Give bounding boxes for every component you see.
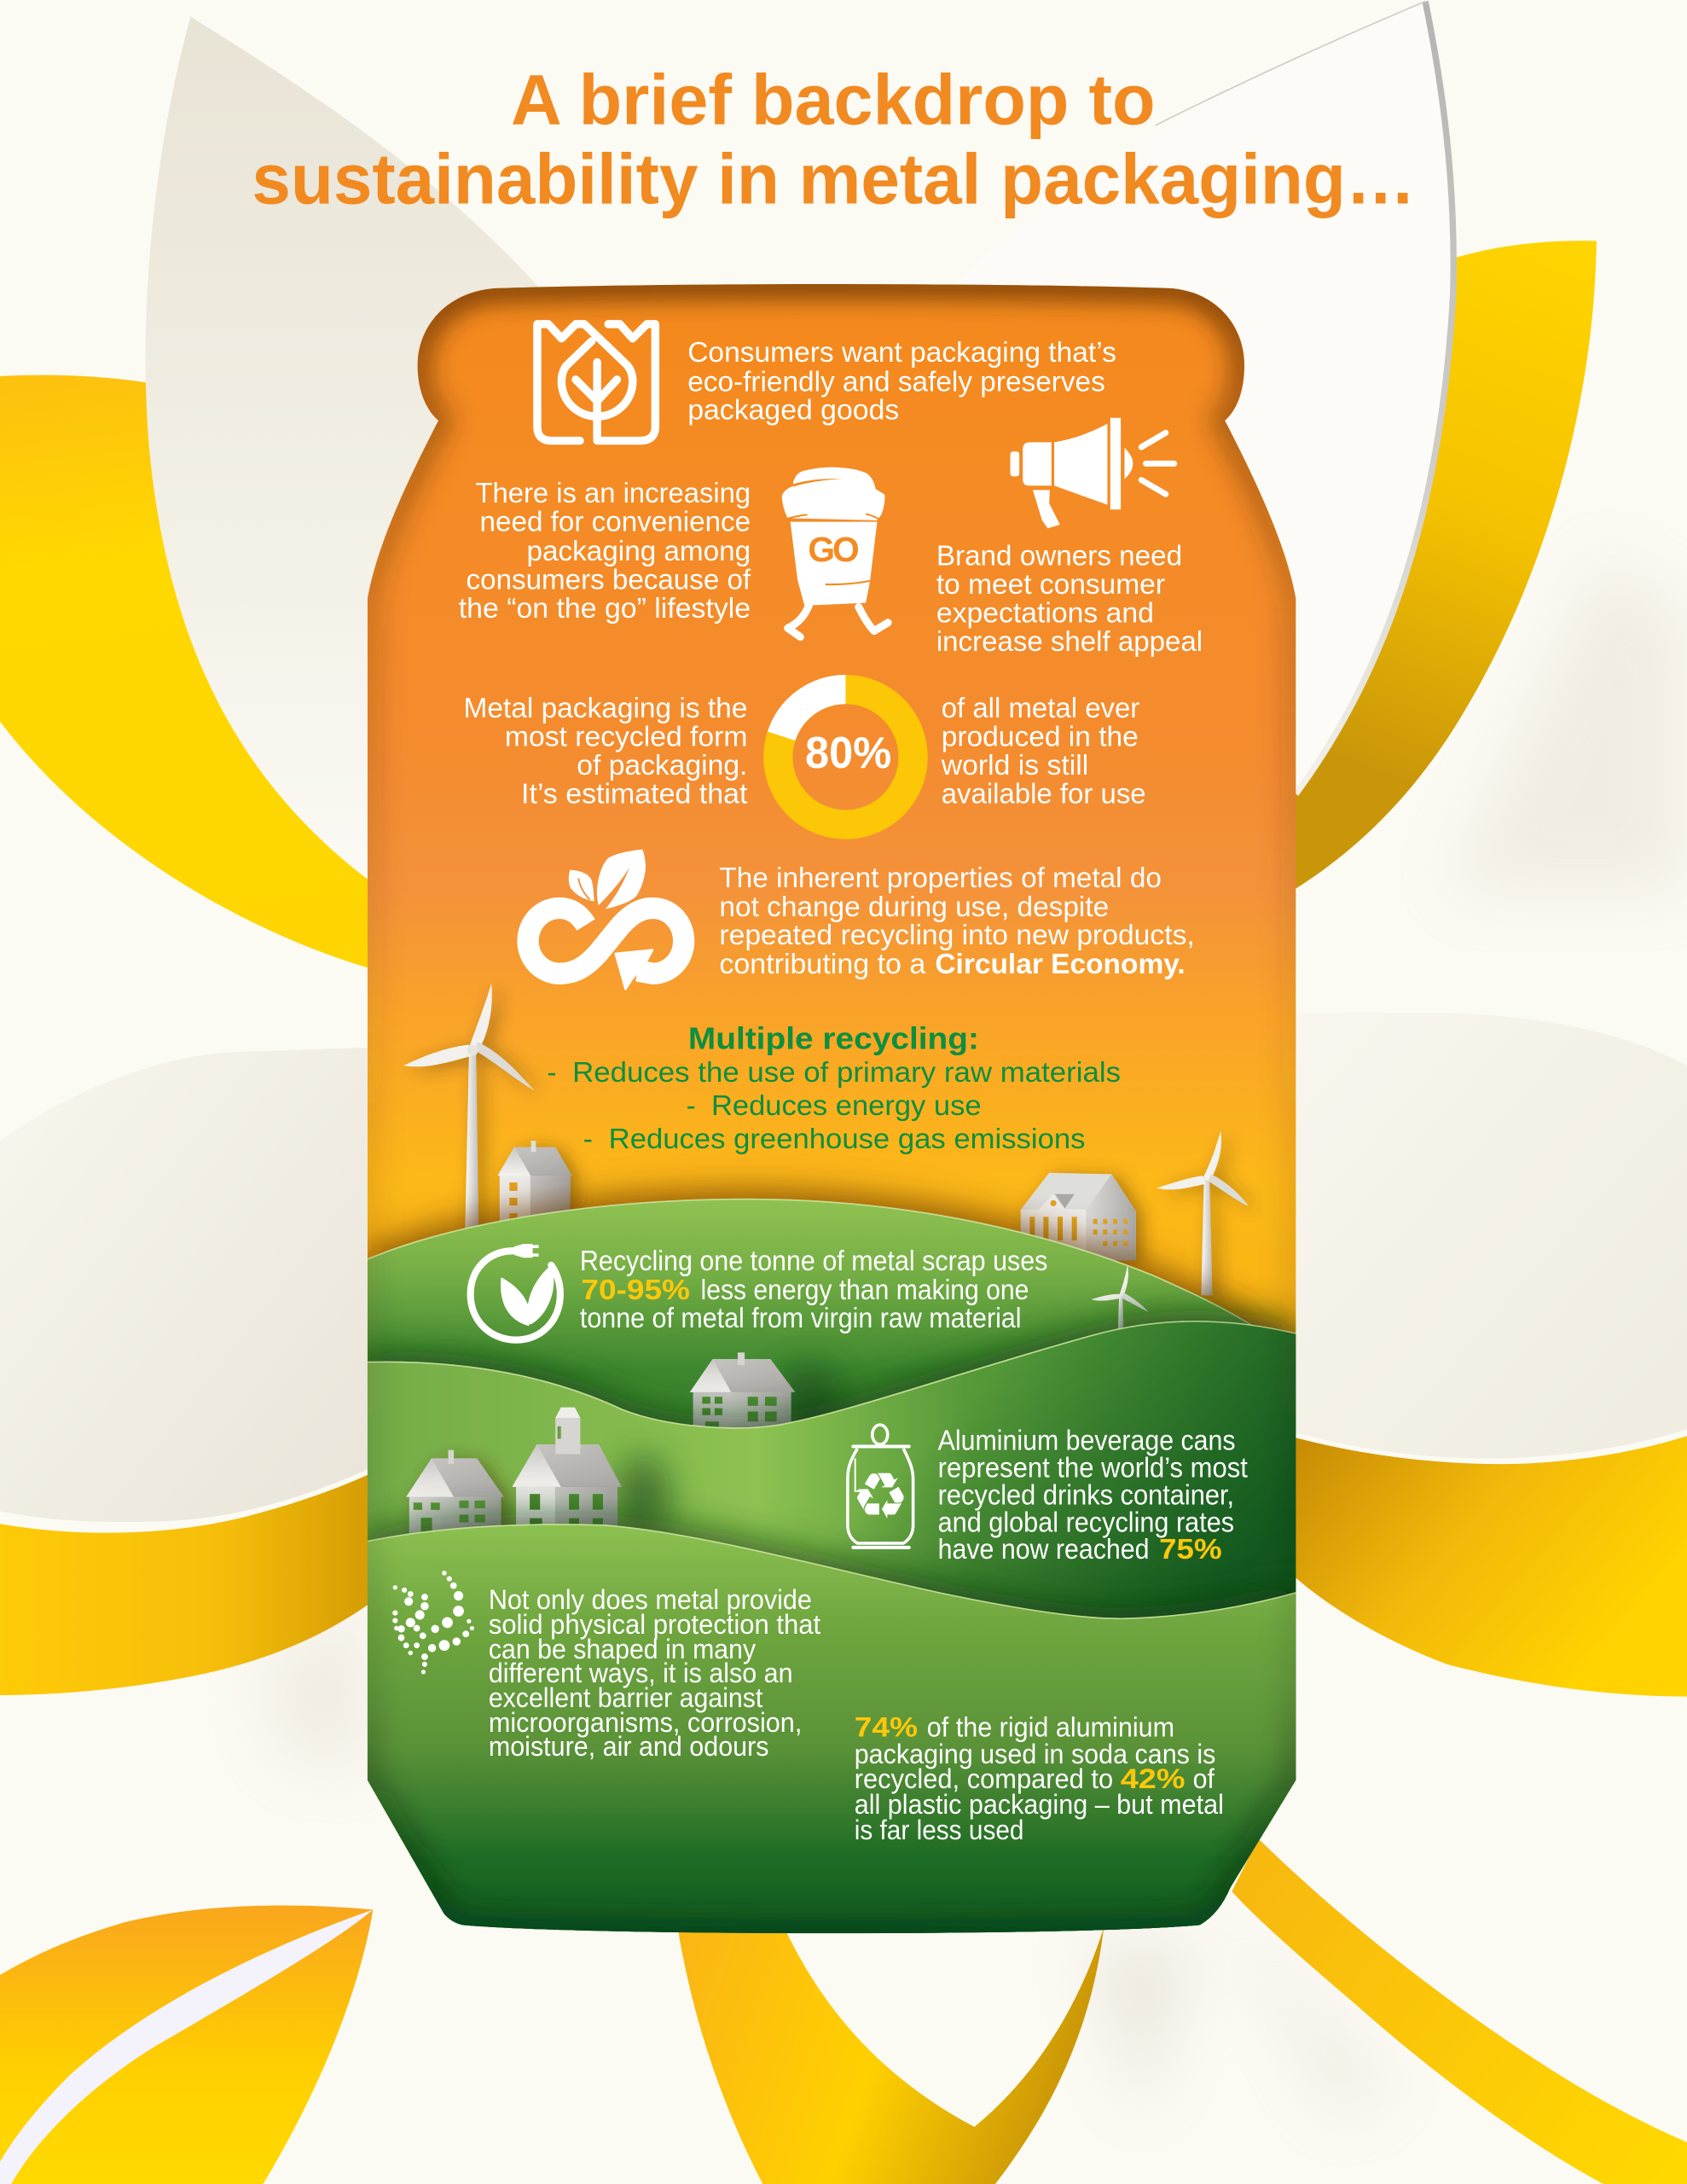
text: not only does metal: solid physical protection that (489, 1609, 820, 1640)
text: multiple recycling: Reduces the use of primary raw materials (572, 1057, 1121, 1089)
hill 1 light green (365, 1199, 1299, 1950)
text: metal most recycled: It’s estimated that (521, 779, 747, 810)
text: inherent properties: not change during use, despite (719, 892, 1109, 923)
text: recycling one tonne: less energy than making one (701, 1275, 1029, 1306)
jar orange background (348, 271, 1322, 1385)
petal: middle right beige (1295, 1013, 1687, 1459)
text: 74 percent rigid aluminium: recycled, compared to (855, 1763, 1113, 1794)
text: aluminium cans: and global recycling rates (938, 1507, 1234, 1539)
text: inherent properties (719, 863, 1195, 980)
text: convenience (459, 478, 751, 624)
text: consumers want: Consumers want packaging that’s (687, 337, 1116, 369)
jar panel (348, 271, 1322, 1950)
text: recycling one tonne: 70-95% (581, 1275, 690, 1306)
icon: bag with leaf (537, 324, 655, 441)
chart: 80% donut (778, 689, 913, 825)
text: inherent properties: The inherent properties of metal do (719, 863, 1162, 894)
text: multiple recycling: - (687, 1090, 696, 1122)
text: inherent properties: Circular Economy. (935, 949, 1186, 980)
text: 74 percent rigid aluminium (855, 1712, 1224, 1845)
text: metal most recycled: Metal packaging is the (463, 693, 747, 724)
text: 74 percent rigid aluminium: 74% (855, 1712, 918, 1743)
text: multiple recycling: - (583, 1124, 593, 1155)
text: aluminium cans: Aluminium beverage cans (938, 1426, 1236, 1457)
icon: dotted barrier (393, 1571, 473, 1674)
text: multiple recycling: - (547, 1057, 556, 1089)
text: of all metal: produced in the (942, 722, 1139, 753)
petal: upper right yellow (1253, 241, 1597, 889)
text: convenience: There is an increasing (475, 478, 751, 509)
text: brand owners (936, 541, 1203, 658)
text: consumers want: eco-friendly and safely preserves (687, 366, 1105, 398)
petal: bottom centre V (678, 1928, 1104, 2184)
text: of all metal (941, 693, 1146, 810)
text: aluminium cans: represent the world’s most (938, 1452, 1248, 1484)
jar inner shadow (368, 284, 1296, 1933)
text: convenience: packaging among (527, 536, 751, 567)
text: aluminium cans: have now reached (938, 1534, 1150, 1565)
petal: bottom right band (1232, 1838, 1687, 2184)
wind turbine right (1157, 1131, 1249, 1295)
text: recycling one tonne: Recycling one tonne of metal scrap uses (580, 1246, 1047, 1277)
text: not only does metal (489, 1584, 820, 1762)
text: brand owners: Brand owners need (936, 541, 1182, 572)
title: sustainability in metal packaging… (252, 139, 1416, 218)
text: not only does metal: different ways, it is also an (489, 1658, 793, 1688)
house upper right (1021, 1173, 1136, 1261)
text: metal most recycled: most recycled form (505, 722, 747, 753)
text: recycling one tonne: tonne of metal from virgin raw material (580, 1303, 1022, 1334)
petal: middle left beige (0, 1048, 370, 1522)
text: inherent properties: contributing to a (719, 949, 926, 980)
house upper left (497, 1141, 572, 1233)
chart: 80% donut: 80% (805, 729, 891, 778)
text: 74 percent rigid aluminium: all plastic packaging – but metal (855, 1789, 1224, 1820)
wind turbine large left (403, 984, 535, 1240)
icon: go cup: GO (808, 530, 860, 569)
text: of all metal: world is still (941, 750, 1088, 781)
hill 3 front green (365, 1525, 1299, 1950)
hill 2 mid green (365, 1321, 1299, 1950)
wind turbine small (1091, 1264, 1148, 1340)
icon: plug and leaf ring (471, 1244, 560, 1340)
text: metal most recycled (463, 693, 747, 810)
text: convenience: need for convenience (480, 507, 751, 538)
text: inherent properties: repeated recycling into new products, (719, 920, 1195, 951)
text: of all metal: available for use (942, 779, 1146, 810)
house lower left (406, 1450, 504, 1546)
text: not only does metal: moisture, air and odours (489, 1731, 769, 1762)
text: consumers want (687, 337, 1116, 426)
text: of all metal: of all metal ever (942, 693, 1139, 724)
text: brand owners: expectations and (936, 598, 1154, 630)
text: multiple recycling (547, 1020, 1121, 1155)
text: 74 percent rigid aluminium: is far less used (855, 1815, 1024, 1845)
title (252, 60, 1416, 218)
text: multiple recycling: Reduces energy use (711, 1090, 982, 1122)
text: aluminium cans: 75% (1159, 1534, 1222, 1565)
text: consumers want: packaged goods (687, 394, 899, 426)
house lower middle with tower (512, 1408, 671, 1540)
text: not only does metal: excellent barrier against (489, 1682, 762, 1713)
petal: upper right white with grey rim (960, 2, 1453, 892)
text: aluminium cans (938, 1426, 1248, 1565)
text: brand owners: to meet consumer (936, 569, 1165, 601)
petal: bottom left (0, 1905, 373, 2184)
title: A brief backdrop to (511, 60, 1156, 139)
icon: circular economy (528, 850, 684, 990)
text: not only does metal: can be shaped in many (489, 1634, 756, 1664)
text: recycling one tonne (580, 1246, 1047, 1334)
text: 74 percent rigid aluminium: 42% (1121, 1763, 1185, 1794)
petal: middle left yellow (0, 1473, 370, 1695)
icon: recycling can (848, 1425, 913, 1548)
petal: middle right yellow (1295, 1436, 1687, 1697)
background soft shadows (264, 557, 1687, 2117)
text: 74 percent rigid aluminium: packaging used in soda cans is (855, 1739, 1215, 1769)
text: 74 percent rigid aluminium: of (1193, 1763, 1215, 1794)
house centre (690, 1352, 844, 1454)
petal: upper left yellow (0, 375, 368, 968)
text: 74 percent rigid aluminium: of the rigid aluminium (927, 1712, 1174, 1743)
text: not only does metal: Not only does metal provide (489, 1584, 812, 1615)
icon: recycling can: ♻ (852, 1459, 909, 1534)
text: aluminium cans: recycled drinks container, (938, 1480, 1234, 1512)
icon: go cup (782, 468, 888, 637)
text: metal most recycled: of packaging. (577, 750, 747, 781)
text: multiple recycling: Multiple recycling: (688, 1020, 979, 1055)
text: convenience: consumers because of (467, 564, 751, 595)
text: convenience: the “on the go” lifestyle (459, 593, 751, 624)
petal: upper left beige (146, 17, 550, 892)
text: multiple recycling: Reduces greenhouse gas emissions (609, 1124, 1085, 1155)
text: brand owners: increase shelf appeal (936, 626, 1203, 658)
icon: megaphone (1011, 418, 1174, 528)
text: not only does metal: microorganisms, corrosion, (489, 1707, 802, 1738)
